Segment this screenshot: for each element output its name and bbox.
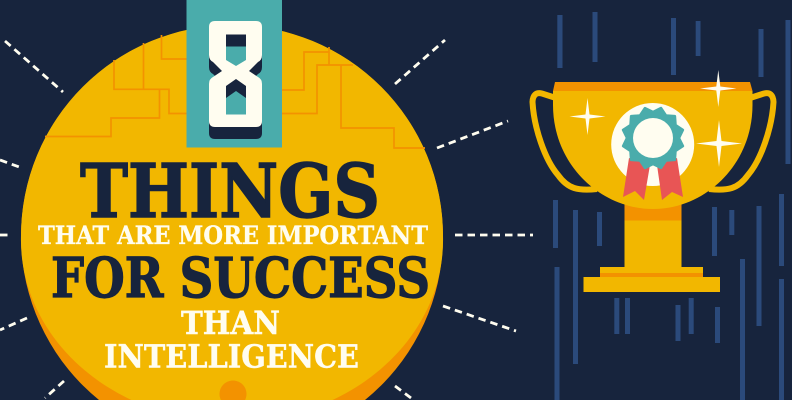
lower base [584,277,720,292]
sparkle left [570,98,606,135]
title: THINGS: THINGS [80,149,380,235]
subtitle: intelligence: INTELLIGENCE [104,338,359,376]
rosette [615,100,691,176]
upper base shadow [600,273,703,277]
trophy handles [532,93,774,190]
blue falling bars [553,12,790,400]
sparkle top right [700,70,736,107]
number 8 [209,21,262,127]
teal banner with number 8 [186,0,282,148]
upper base [600,267,703,277]
medal background [611,103,694,186]
trophy [532,70,774,292]
rosette centre [633,118,673,158]
stem collar [624,200,682,220]
circle shadow [21,25,443,400]
yellow circle [21,25,443,400]
subtitle: than: THAN [181,304,280,342]
bottom dot [220,381,247,400]
trophy stem [624,200,682,267]
bowl rim [553,82,752,91]
sparkle lower right [696,120,742,167]
subtitle: that are more important: THAT ARE MORE IMPORTANT [38,221,428,250]
ribbon right [657,158,683,200]
ribbon left [623,158,650,200]
trophy bowl [553,91,752,209]
title: for success: FOR SUCCESS [51,245,430,310]
dashed rays around circle [0,40,533,398]
circuit lines [45,35,425,148]
number 8 shadow [209,33,262,139]
